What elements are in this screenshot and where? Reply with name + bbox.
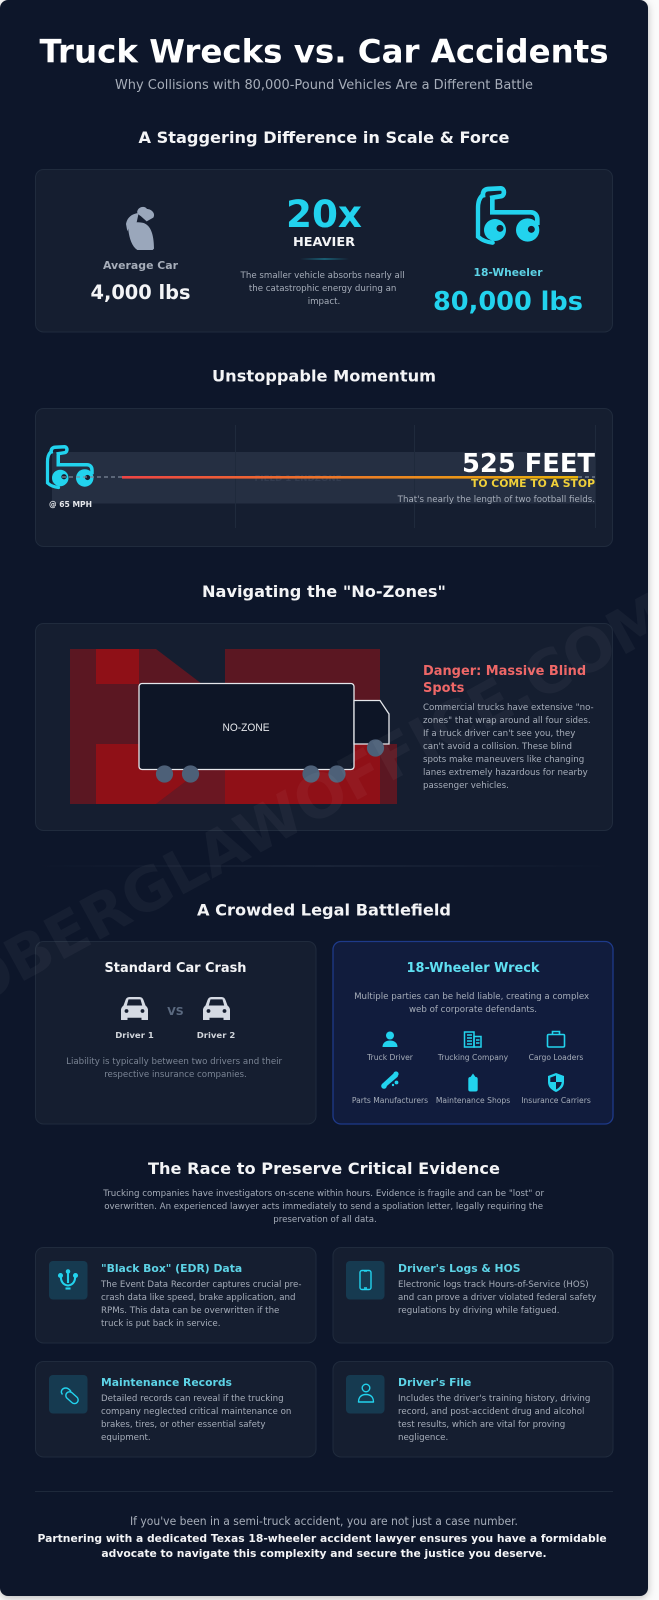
title: Truck Wrecks vs. Car Accidents [40,32,608,70]
text: liability: Liability is typically between two drivers and their [66,1057,283,1067]
panel: 18-wheeler wreck [333,942,613,1124]
road band [52,452,595,504]
faint field labels: FIELD 1 ENDZONE [254,474,342,483]
value: 525 feet: 525 FEET [462,449,595,479]
heading: no-zones: Navigating the "No-Zones" [202,582,446,601]
heading: danger: Spots [423,681,465,696]
body text: and can prove a driver violated federal safety [398,1293,596,1303]
truck wheels [156,739,384,783]
text: impact description: the catastrophic energy during an [249,284,396,294]
label: cargo loaders: Cargo Loaders [529,1053,583,1062]
blind spot zones [70,649,397,804]
icon: person [358,1384,374,1402]
text: danger description: Commercial trucks have extensive "no- [423,703,594,713]
text: danger description: passenger vehicles. [423,781,509,791]
text: multiple parties: Multiple parties can be held liable, creating a complex [354,992,589,1002]
heading: car crash: Standard Car Crash [104,961,246,976]
label: speed: @ 65 MPH [49,500,92,509]
text: footer intro: If you've been in a semi-truck accident, you are not just a case number. [130,1514,518,1528]
heading: scale and force: A Staggering Difference in Scale & Force [138,128,510,147]
body text: record, and post-accident drug and alcohol [398,1407,584,1417]
icon box [346,1261,384,1300]
label: driver 2: Driver 2 [197,1031,235,1040]
text: danger description: can't avoid a collision. These blind [423,742,572,752]
icon box [49,1261,88,1300]
icon: maintenance shops [468,1074,478,1092]
value: 4,000 lbs: 4,000 lbs [90,281,190,304]
label: parts manufacturers: Parts Manufacturers [352,1096,428,1105]
subtitle: Why Collisions with 80,000-Pound Vehicles Are a Different Battle [115,78,533,93]
icon: parts manufacturers [381,1071,399,1089]
label: maintenance shops: Maintenance Shops [436,1096,510,1105]
label: heavier: HEAVIER [293,234,355,249]
text: danger description: zones" that wrap around all four sides. [423,716,591,726]
text: evidence intro: preservation of all data. [273,1215,377,1225]
icon: wrench [61,1388,80,1405]
text: liability: respective insurance companies. [104,1070,247,1080]
body text: The Event Data Recorder captures crucial pre- [100,1280,302,1290]
card: black box [36,1248,316,1343]
body text: truck is put back in service. [101,1319,220,1329]
text: football fields: That's nearly the length of two football fields. [397,495,595,505]
label: insurance carriers: Insurance Carriers [521,1096,591,1105]
value: 80,000 lbs: 80,000 lbs [433,287,583,317]
braking line [122,476,578,479]
text: evidence intro: overwritten. An experienced lawyer acts immediately to send a spoliation letter, legally requiring the [104,1202,543,1212]
heading: momentum: Unstoppable Momentum [212,366,436,386]
body text: RPMs. This data can be overwritten if the [101,1306,279,1316]
icon: car 2 [203,997,230,1020]
icon: car 1 [121,997,148,1020]
icon: truck [48,447,94,487]
text: footer message: Partnering with a dedicated Texas 18-wheeler accident lawyer ensures you have a formidable [38,1532,607,1545]
icon: insurance carriers [548,1073,564,1092]
label: trucking company: Trucking Company [437,1053,509,1062]
icon: cargo loaders [548,1032,564,1047]
truck cab [354,700,389,744]
label: to come to a stop: TO COME TO A STOP [471,477,595,490]
title: "Black Box" (EDR) Data [101,1262,242,1275]
body text: negligence. [398,1433,448,1443]
title: Maintenance Records [101,1376,232,1389]
text: impact description: The smaller vehicle absorbs nearly all [240,271,405,281]
text: danger description: If a truck driver can't see you, they [423,729,575,739]
icon: truck driver [382,1032,398,1047]
body text: crash data like speed, brake application, and [101,1293,296,1303]
text: multiple parties: web of corporate defendants. [409,1005,537,1015]
body text: test results, which are vital for proving [398,1420,565,1430]
body text: Electronic logs track Hours-of-Service (HOS) [398,1280,589,1290]
text: evidence intro: Trucking companies have investigators on-scene within hours. Evidence is fragile and can be "lost" or [102,1189,544,1199]
icon: black box [59,1270,77,1288]
icon: 18-wheeler [478,188,539,243]
body text: regulations by driving while fatigued. [398,1306,559,1316]
icon: car [126,207,154,250]
label: driver 1: Driver 1 [115,1031,154,1040]
label: average car: Average Car [103,259,179,272]
text: footer message: advocate to navigate this complexity and secure the justice you deserve. [101,1547,547,1560]
truck trailer [139,684,354,770]
card: maintenance records [36,1362,316,1457]
label: vs: VS [167,1005,184,1018]
title: Driver's File [398,1376,471,1389]
label: no-zone: NO-ZONE [222,722,270,734]
value: 20x: 20x [286,192,362,236]
text: impact description: impact. [308,297,340,307]
heading: evidence: The Race to Preserve Critical Evidence [148,1159,500,1178]
card: driver logs [333,1248,613,1343]
icon box [49,1375,88,1414]
text: danger description: lanes extremely hazardous for nearby [423,768,588,778]
body text: Includes the driver's training history, driving [398,1394,590,1404]
icon box [346,1375,384,1414]
panel: standard car crash [36,942,316,1124]
card: driver file [333,1362,613,1457]
panel: no-zones [36,624,612,830]
title: Driver's Logs & HOS [398,1262,521,1275]
body text: brakes, tires, or other essential safety [101,1420,265,1430]
panel: stopping distance [36,408,612,546]
panel: scale and force [36,170,612,332]
heading: wreck: 18-Wheeler Wreck [406,961,540,976]
body text: equipment. [101,1433,151,1443]
icon: trucking company [464,1032,481,1047]
text: danger description: spots make maneuvers like changing [423,755,584,765]
label: 18-wheeler: 18-Wheeler [474,267,543,279]
heading: legal battlefield: A Crowded Legal Battlefield [197,900,451,920]
heading: danger: Danger: Massive Blind [423,664,586,679]
label: truck driver: Truck Driver [366,1053,414,1062]
body text: Detailed records can reveal if the trucking [101,1394,284,1404]
body text: company neglected critical maintenance on [101,1407,291,1417]
dashed lead line [62,476,122,478]
icon: phone [360,1270,371,1290]
